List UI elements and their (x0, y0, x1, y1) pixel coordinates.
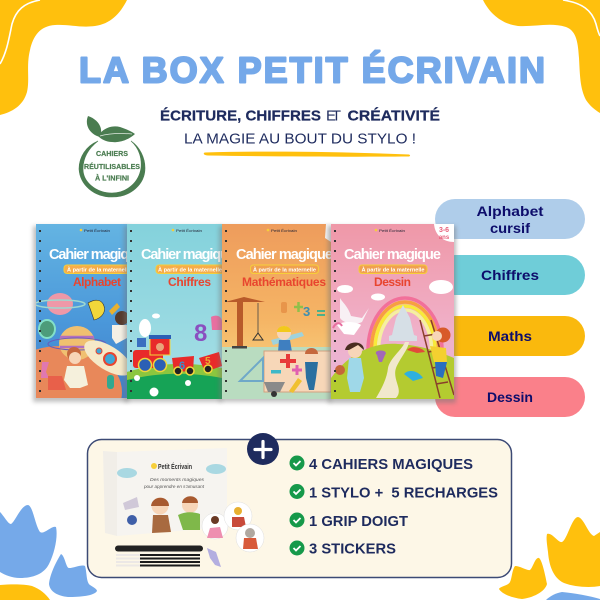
pill: Alphabet cursif (435, 199, 585, 239)
title: LA BOX PETIT ÉCRIVAIN (79, 50, 545, 90)
product box: pour apprendre en s'amusant (143, 484, 205, 489)
finger grip (207, 548, 221, 567)
item: pen and refills: 1 STYLO + 5 RECHARGES (309, 484, 498, 502)
book: Dessin (328, 224, 456, 403)
badge text: CAHIERS (96, 149, 128, 158)
badge: reusable notebooks (79, 116, 145, 197)
book: Mathématiques: À partir de la maternelle (253, 266, 317, 274)
yellow underline (204, 152, 410, 157)
book: Chiffres: 8 (194, 320, 207, 347)
pill: Dessin: Dessin (487, 389, 533, 405)
book: Alphabet: Alphabet (73, 275, 121, 289)
book: Dessin: Cahier magique (344, 247, 441, 263)
book: Chiffres: Cahier magique (141, 247, 236, 263)
icon: leaves (87, 116, 135, 142)
book: Mathématiques: Petit Écrivain (271, 228, 297, 233)
book: Alphabet: À partir de la maternelle (67, 266, 132, 274)
age tab: ans (439, 235, 450, 241)
subtitle: CRÉATIVITÉ (348, 108, 440, 124)
book: Dessin: Petit Écrivain (379, 228, 405, 233)
icon: plus (247, 433, 279, 465)
pill: Alphabet cursif: Alphabet (476, 203, 544, 219)
subtitle: LA MAGIE AU BOUT DU STYLO ! (184, 130, 416, 148)
book: Alphabet: Cahier magique (49, 247, 144, 263)
spiral binding (334, 230, 336, 396)
spiral binding (225, 230, 227, 396)
item: stickers: 3 STICKERS (309, 540, 396, 558)
pill: Chiffres (435, 255, 585, 295)
spiral binding (39, 230, 41, 396)
pill: Chiffres: Chiffres (481, 267, 539, 283)
decoration: top-right yellow wave (483, 0, 600, 113)
book: Chiffres: 5 (205, 356, 211, 367)
spiral binding (130, 230, 132, 396)
rainbow (368, 298, 442, 350)
pill: Dessin (435, 377, 585, 417)
book: Dessin: À partir de la maternelle (362, 266, 425, 274)
product box: Des moments magiques (150, 477, 205, 482)
age tab (434, 224, 454, 242)
item: grip: 1 GRIP DOIGT (309, 513, 408, 530)
stickers (202, 502, 264, 552)
book: Dessin: Dessin (374, 275, 411, 289)
badge text (84, 149, 140, 182)
book: Mathématiques: Mathématiques (242, 275, 326, 289)
book: Chiffres: Chiffres (168, 275, 211, 289)
product box (103, 448, 227, 536)
pill: Alphabet cursif: cursif (490, 220, 530, 236)
book: Mathématiques (219, 224, 333, 402)
book: Chiffres: À partir de la maternelle (158, 266, 223, 274)
age tab: 3-6 (439, 227, 449, 234)
book: Alphabet: Petit Écrivain (84, 228, 110, 233)
badge text: À L'INFINI (95, 174, 129, 182)
pill: Maths: Maths (488, 328, 532, 344)
product box: Petit Écrivain (158, 462, 192, 471)
decoration: bottom-left crowns (0, 505, 97, 600)
book: Mathématiques: 3 (303, 304, 310, 319)
ring (79, 141, 145, 197)
pill: Maths (435, 316, 585, 356)
subtitle (160, 108, 440, 148)
panel: box contents (88, 433, 512, 578)
book: Chiffres: 6 (179, 360, 185, 372)
book: Chiffres: Petit Écrivain (176, 228, 202, 233)
book: Alphabet (30, 224, 130, 404)
pen and refills (115, 546, 203, 566)
subtitle: ET (326, 108, 341, 124)
book: Mathématiques: Cahier magique (236, 247, 333, 263)
decoration: top-left yellow wave (0, 0, 127, 115)
item: notebooks: 4 CAHIERS MAGIQUES (309, 456, 473, 473)
checklist (290, 456, 498, 558)
book: Chiffres (124, 224, 236, 402)
badge text: RÉUTILISABLES (84, 162, 140, 171)
decoration: bottom-right crowns (499, 517, 600, 600)
subtitle: ÉCRITURE, CHIFFRES (160, 108, 321, 124)
